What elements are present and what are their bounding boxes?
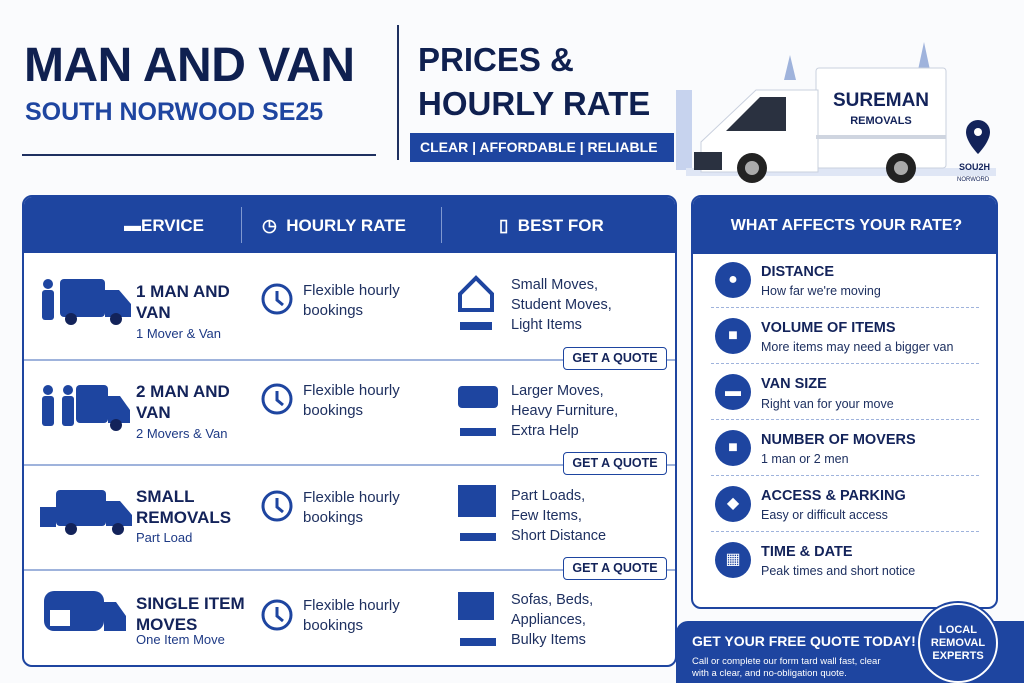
row 4 — [44, 591, 593, 648]
row 4: Appliances, — [511, 612, 586, 628]
van illustration — [676, 42, 996, 183]
table header: ▯ BEST FOR — [499, 216, 604, 235]
row 1: Flexible hourly — [303, 282, 400, 299]
row 2: Extra Help — [511, 423, 579, 439]
row 4: Flexible hourly — [303, 597, 400, 614]
panel: what affects your rate: Right van for your move — [761, 397, 894, 411]
row 2: Heavy Furniture, — [511, 403, 618, 419]
table header: ◷ HOURLY RATE — [262, 216, 406, 235]
row 1: 1 Mover & Van — [136, 326, 221, 341]
row 4: One Item Move — [136, 632, 225, 647]
panel: what affects your rate: WHAT AFFECTS YOUR RATE? — [731, 217, 962, 234]
row 3: Few Items, — [511, 508, 582, 524]
badge: local removal experts: LOCAL — [939, 624, 977, 636]
panel: what affects your rate — [691, 195, 998, 609]
heading: prices — [418, 41, 650, 122]
table header: ▬ERVICE — [124, 216, 204, 235]
row 2: 2 MAN AND — [136, 382, 230, 401]
badge: local removal experts: REMOVAL — [931, 637, 985, 649]
row 2: Larger Moves, — [511, 383, 604, 399]
button: get a quote 1: GET A QUOTE — [572, 351, 658, 365]
panel: what affects your rate: NUMBER OF MOVERS — [761, 432, 916, 448]
row 3: bookings — [303, 509, 363, 526]
van illustration: REMOVALS — [850, 115, 912, 127]
van illustration: SOU2H — [959, 162, 990, 172]
panel: what affects your rate: How far we're moving — [761, 284, 881, 298]
banner: CLEAR | AFFORDABLE | RELIABLE — [420, 139, 658, 155]
button: get a quote 3 — [563, 557, 667, 580]
row 1: VAN — [136, 303, 171, 322]
heading: prices: PRICES & — [418, 41, 574, 78]
panel: services table — [22, 195, 677, 667]
row 1 — [42, 275, 612, 341]
row 3: REMOVALS — [136, 508, 231, 527]
panel: what affects your rate: More items may need a bigger van — [761, 340, 953, 354]
row 3: Part Loads, — [511, 488, 585, 504]
panel: what affects your rate: Easy or difficult access — [761, 508, 888, 522]
row 1: Student Moves, — [511, 297, 612, 313]
row 4: Sofas, Beds, — [511, 592, 593, 608]
badge: local removal experts: EXPERTS — [932, 650, 984, 662]
row 3: Flexible hourly — [303, 489, 400, 506]
button: get a quote 2: GET A QUOTE — [572, 456, 658, 470]
panel: what affects your rate: ● — [728, 271, 738, 288]
panel: what affects your rate: ACCESS & PARKING — [761, 488, 906, 504]
callout: free quote banner: Call or complete our form tard wall fast, clear — [692, 656, 880, 667]
subtitle: SOUTH NORWOOD SE25 — [25, 98, 323, 126]
row 4: MOVES — [136, 615, 197, 634]
row 3: SMALL — [136, 487, 195, 506]
row 4: bookings — [303, 617, 363, 634]
banner — [410, 133, 674, 162]
heading: prices: HOURLY RATE — [418, 85, 650, 122]
panel: what affects your rate: TIME & DATE — [761, 544, 853, 560]
button: get a quote 3: GET A QUOTE — [572, 561, 658, 575]
van illustration: SUREMAN — [833, 90, 929, 111]
panel: what affects your rate: 1 man or 2 men — [761, 452, 849, 466]
row 1: bookings — [303, 302, 363, 319]
callout: free quote banner: with a clear, and no-obligation quote. — [692, 668, 847, 679]
panel: what affects your rate: VAN SIZE — [761, 376, 827, 392]
row 2: 2 Movers & Van — [136, 426, 228, 441]
row 4: Bulky Items — [511, 632, 586, 648]
row 2: Flexible hourly — [303, 382, 400, 399]
panel: what affects your rate: ■ — [728, 327, 738, 344]
panel: what affects your rate: Peak times and short notice — [761, 564, 915, 578]
row 3: Short Distance — [511, 528, 606, 544]
panel: what affects your rate: ▬ — [725, 383, 741, 400]
row 3 — [40, 485, 606, 545]
callout: free quote banner — [676, 621, 1024, 683]
panel: what affects your rate: VOLUME OF ITEMS — [761, 320, 896, 336]
row 2 — [42, 382, 618, 441]
row 3: Part Load — [136, 530, 192, 545]
row 1: Small Moves, — [511, 277, 598, 293]
panel: what affects your rate: ■ — [728, 439, 738, 456]
panel: what affects your rate: ▦ — [725, 551, 741, 568]
panel: what affects your rate: DISTANCE — [761, 264, 834, 280]
row 1: Light Items — [511, 317, 582, 333]
panel: what affects your rate: ◆ — [727, 495, 739, 512]
van illustration: NORWORD — [957, 177, 990, 183]
row 4: SINGLE ITEM — [136, 594, 245, 613]
callout: free quote banner: GET YOUR FREE QUOTE TODAY! — [692, 633, 916, 649]
title: MAN AND VAN — [24, 39, 354, 92]
row 2: VAN — [136, 403, 171, 422]
badge: local removal experts — [918, 603, 998, 683]
row 2: bookings — [303, 402, 363, 419]
button: get a quote 1 — [563, 347, 667, 370]
table header — [24, 197, 679, 253]
button: get a quote 2 — [563, 452, 667, 475]
row 1: 1 MAN AND — [136, 282, 230, 301]
